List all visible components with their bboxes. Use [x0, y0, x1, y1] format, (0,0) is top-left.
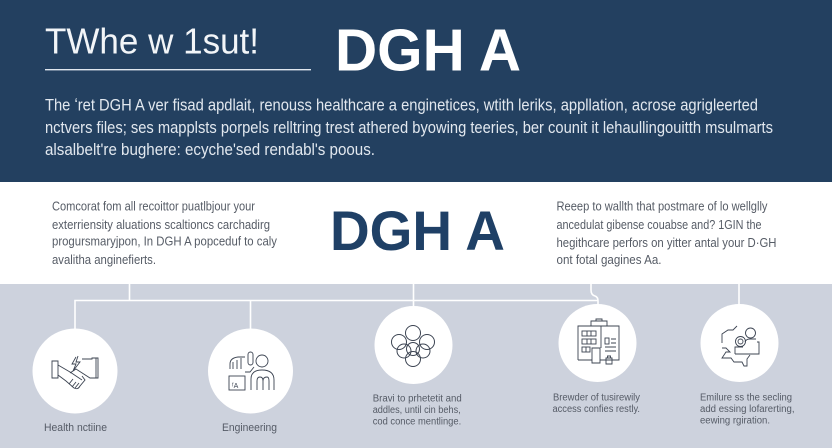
text block: contact: Emilure ss the secling: [700, 393, 792, 404]
connector lines: [75, 284, 739, 330]
text block: right: Reeep to wallth that postmare of lo wellglly: [556, 200, 768, 214]
text block: network: addles, until cin behs,: [373, 405, 461, 416]
text block: left: [52, 200, 278, 267]
label: health: Health nctiine: [44, 422, 107, 434]
text block: left: Comcorat fom all recoittor puatlbjour your: [52, 200, 255, 214]
heading: DGH A centre: DGH A: [330, 199, 505, 262]
text block: intro: [45, 96, 773, 159]
text block: intro: alsalbelt're bughere: ecyche'sed rendabl's poous.: [45, 141, 375, 159]
title underline: [45, 69, 311, 70]
item: contact: [700, 304, 778, 382]
text block: right: ont fotal gagines Aa.: [556, 253, 662, 267]
text block: contact: [700, 393, 794, 427]
icon: engineer: ᶠA: [232, 383, 239, 390]
text block: left: exterriensity aluations scaltioncs carchadirg: [52, 218, 270, 232]
text block: right: ancedulat gibense couabse and? 1GIN the: [556, 218, 762, 232]
item: network: [374, 306, 452, 384]
item: building: [558, 304, 636, 382]
title: TWhe w 1sut!: [45, 20, 259, 62]
text block: contact: add essing lofarerting,: [700, 404, 794, 415]
panel: middle band: [0, 182, 832, 284]
panel: header: [0, 0, 832, 182]
text block: left: avalitha anginefierts.: [52, 253, 156, 267]
text block: network: cod conce mentlinge.: [373, 416, 461, 427]
text block: right: [556, 200, 776, 267]
panel: lower band: [0, 284, 832, 448]
text block: right: hegithcare perfors on yitter antal your D·GH: [556, 236, 776, 250]
text block: left: progursmaryjpon, In DGH A popceduf to caly: [52, 234, 278, 248]
text block: building: [552, 393, 640, 415]
heading: DGH A: DGH A: [335, 18, 521, 84]
icon: handshake: [52, 356, 98, 389]
label: engineering: Engineering: [222, 422, 277, 434]
text block: network: Bravi to prhetetit and: [373, 394, 462, 405]
item: health: [32, 328, 118, 414]
text block: building: Brewder of tusirewily: [553, 393, 640, 404]
text block: building: access confies restly.: [552, 404, 640, 415]
text block: network: [373, 394, 462, 427]
text block: intro: The ʻret DGH A ver fisad apdlait, renouss healthcare a enginetices, wtith leriks, appllation, acrose agrigleerted: [45, 96, 758, 114]
item: engineering: [208, 328, 293, 414]
text block: contact: eewing rgiration.: [700, 416, 770, 427]
icon: map and person: [722, 326, 759, 366]
icon: interlinked rings: [392, 326, 434, 366]
icon: building: [578, 319, 619, 364]
